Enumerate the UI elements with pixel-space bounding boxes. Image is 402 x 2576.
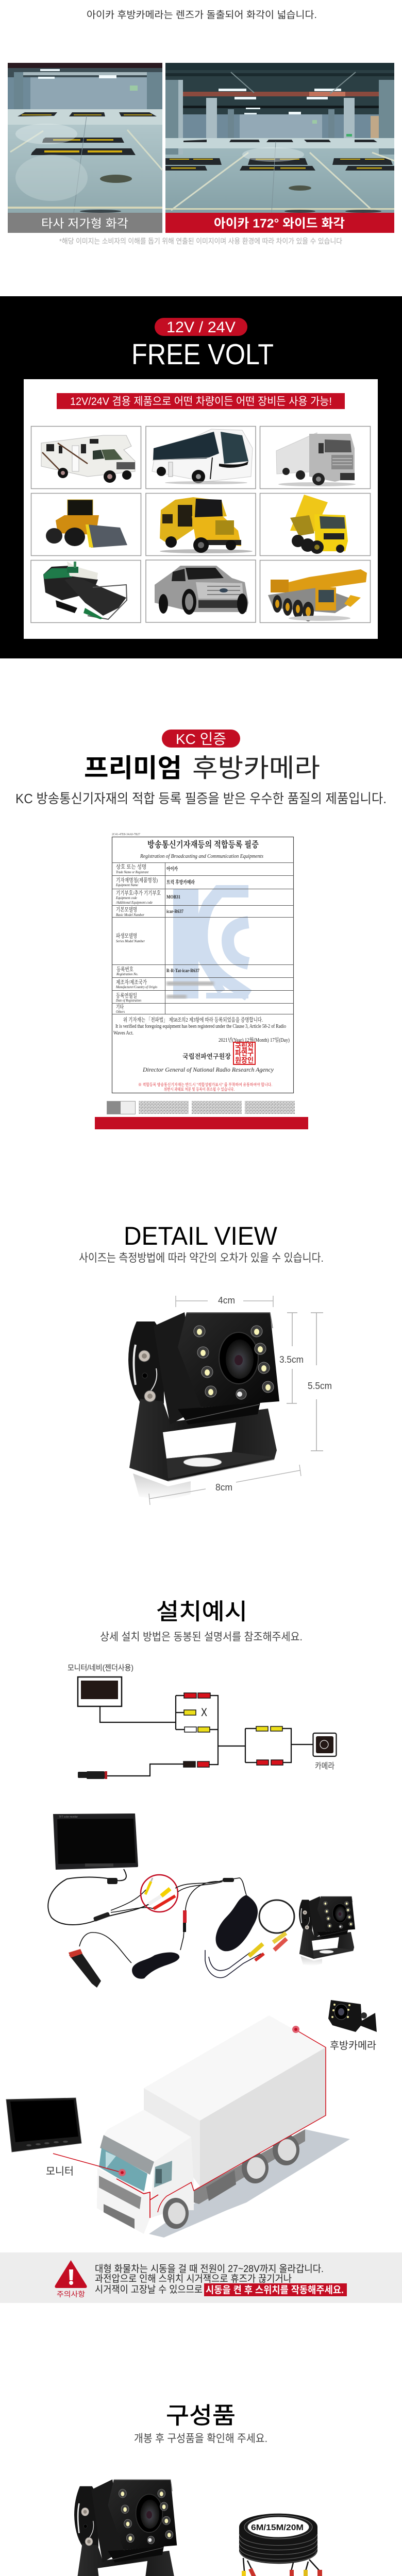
certificate text: R-R-Tat-icar-R637 xyxy=(166,968,199,973)
certificate text: 파생모델명 xyxy=(116,932,137,939)
product wiring photo xyxy=(48,1814,355,1988)
pill: KC: KC 인증 xyxy=(176,731,226,747)
cable coil small and power plug xyxy=(69,1933,179,1988)
photo: narrow angle parking lot xyxy=(8,63,162,213)
official stamp xyxy=(233,1042,255,1064)
component: video cable coil xyxy=(239,2514,322,2576)
warning highlight: 시동을 켠 후 스위치를 작동해주세요. xyxy=(206,2284,344,2296)
RCA connectors in red circle xyxy=(141,1875,178,1912)
certificate text: Basic Model Number xyxy=(116,913,144,917)
component: rear camera xyxy=(74,2479,177,2576)
certificate text: Equipment Name xyxy=(115,883,138,887)
caption: icar wide angle: 아이카 172° 와이드 화각 xyxy=(214,216,345,231)
certificate table lines xyxy=(112,862,294,1014)
vehicle grid frames xyxy=(31,427,370,622)
heading: components: 구성품 xyxy=(166,2402,236,2429)
certificate text: Trade Name or Registrant xyxy=(116,870,149,874)
vehicle: coach bus xyxy=(152,429,253,484)
dimension: width 4cm: 4cm xyxy=(218,1295,235,1306)
official stamp: 파연구 xyxy=(235,1049,254,1057)
certificate text: Director General of National Radio Research Agency xyxy=(142,1066,274,1073)
certificate text: 등록번호 xyxy=(116,965,133,973)
certificate text: It is verified that foregoing equipment has been registered under the Clause 3, Article 58-2 of Radio xyxy=(115,1024,286,1029)
heading: free volt: FREE VOLT xyxy=(131,338,274,371)
warning text: 과전압으로 인해 스위치 시거잭으로 휴즈가 끊기거나 xyxy=(95,2273,292,2284)
panel: viewing angle comparison xyxy=(8,9,394,245)
panel: detail view xyxy=(79,1222,332,1505)
heading: detail view: DETAIL VIEW xyxy=(124,1222,278,1250)
dimension: height 3.5cm: 3.5cm xyxy=(279,1354,304,1365)
connectors xyxy=(183,1693,283,1767)
icon: monitor xyxy=(78,1677,122,1706)
certificate text: icar-R637 xyxy=(166,909,183,914)
official stamp: 원장인 xyxy=(235,1056,254,1064)
certificate document: 2C41-47E8-34A0-7B27 xyxy=(112,833,140,836)
caption: other brand xyxy=(8,213,162,233)
certificate text: MOB31 xyxy=(166,894,180,900)
icon: warning triangle xyxy=(55,2260,87,2298)
pill: 12V / 24V xyxy=(155,318,247,336)
KC watermark xyxy=(173,889,248,998)
vehicle: box truck xyxy=(276,433,356,486)
certificate text xyxy=(113,839,290,1092)
icon: cigar plug xyxy=(78,1771,107,1779)
certificate text: ※ 적합등록 방송통신기자재는 반드시 "적합성평가표시" 를 부착하여 유통하여야 합니다. xyxy=(138,1082,272,1087)
certificate text: 2021년(Year) 12월(Month) 17일(Day) xyxy=(219,1037,290,1043)
certificate text: 기자재명칭(제품명칭) xyxy=(116,876,158,884)
caption: icar wide angle xyxy=(165,213,394,233)
wiring nodes xyxy=(119,2026,299,2176)
certificate text: Equipment code xyxy=(115,896,137,900)
certificate text: 아이카 xyxy=(166,866,178,872)
subheading: 사이즈는 측정방법에 따라 약간의 오차가 있을 수 있습니다. xyxy=(79,1251,324,1264)
vehicle: mobile crane xyxy=(268,569,367,621)
label: monitor: 모니터 xyxy=(46,2165,74,2177)
icon: camera xyxy=(313,1733,336,1756)
cable coil large xyxy=(216,1895,258,1951)
wiring diagram xyxy=(68,1664,336,1779)
heading: premium rear camera: 프리미엄 xyxy=(84,754,182,783)
certificate text: Date of Registration xyxy=(115,998,141,1003)
camera product image xyxy=(128,1312,279,1500)
camera cable loop and plugs xyxy=(205,1900,294,1978)
white vehicle panel xyxy=(24,379,378,639)
certificate text: Series Model Number xyxy=(116,939,145,943)
certificate text: 위반시 과태료 처분 및 등록이 취소될 수 있습니다. xyxy=(164,1087,234,1092)
monitor photo xyxy=(53,1814,138,1870)
camera thumbnail xyxy=(328,2000,377,2032)
monitor cable xyxy=(48,1869,155,1925)
certificate text: 트럭 후방카메라 xyxy=(166,879,195,886)
caption: other brand: 타사 저가형 화각 xyxy=(41,216,128,230)
icon: warning triangle: 주의사항 xyxy=(57,2290,85,2298)
certificate text: 국립전파연구원장 xyxy=(182,1053,231,1060)
warning text xyxy=(95,2263,324,2295)
warning text: 시거잭이 고장날 수 있으므로 xyxy=(95,2284,203,2295)
official stamp: 국립전 xyxy=(235,1042,254,1050)
dimension: height 5.5cm xyxy=(308,1313,332,1451)
warning band xyxy=(0,2252,402,2303)
barcodes xyxy=(107,1101,295,1114)
chassis and wheels xyxy=(194,2129,305,2204)
panel: installation example xyxy=(0,1599,402,2303)
wires xyxy=(100,1696,313,1776)
warning text: 대형 화물차는 시동을 걸 때 전원이 27~28V까지 올라갑니다. xyxy=(95,2263,324,2275)
pill: 12V / 24V: 12V / 24V xyxy=(166,319,236,336)
certificate text: 기기부호/추가 기기부호 xyxy=(116,889,161,896)
vehicle: pickup xyxy=(155,566,248,615)
video cable and red plug xyxy=(175,1878,246,1950)
monitor photo: TFT color monitor xyxy=(59,1816,78,1819)
intro text: 아이카 후방카메라는 렌즈가 돌출되어 화각이 넓습니다. xyxy=(87,9,317,21)
wiring diagram: 모니터/네비(젠더사용) xyxy=(68,1664,133,1672)
certificate text: 기본모델명 xyxy=(116,906,137,913)
banner: any vehicle: 12V/24V 겸용 제품으로 어떤 차량이든 어떤 장비든 사용 가능! xyxy=(70,396,332,408)
certificate text: Others xyxy=(116,1010,125,1014)
dimension: height 3.5cm xyxy=(279,1313,304,1403)
certificate text: Manufacturer/Country of Origin xyxy=(115,985,157,989)
certificate red bar xyxy=(95,1117,308,1129)
wiring diagram: X xyxy=(201,1706,207,1719)
certificate text: 등록연월일 xyxy=(116,992,137,999)
subheading: KC 방송통신기자재의 적합 등록 필증을 받은 우수한 품질의 제품입니다. xyxy=(15,791,387,806)
vehicle: combine harvester xyxy=(43,562,127,619)
wiring diagram: 카메라 xyxy=(315,1761,334,1771)
heading: premium rear camera xyxy=(84,754,320,783)
red wiring route xyxy=(53,2030,326,2218)
pill: KC xyxy=(162,730,240,748)
panel: free volt xyxy=(0,296,402,658)
dimension: width 4cm xyxy=(176,1295,273,1307)
certificate text: 기타 xyxy=(116,1003,124,1010)
vehicle: motorhome xyxy=(41,435,135,483)
certificate text: 제조자/제조국가 xyxy=(116,978,147,986)
cargo box xyxy=(144,2015,326,2187)
subheading: 상세 설치 방법은 동봉된 설명서를 참조해주세요. xyxy=(100,1631,303,1643)
certificate text: 상호 또는 성명 xyxy=(116,863,146,870)
certificate text: Registration of Broadcasting and Communication Equipments xyxy=(140,853,263,859)
vehicle: tracked bulldozer xyxy=(46,500,127,548)
dimension: depth 8cm xyxy=(149,1465,301,1505)
label: rear camera: 후방카메라 xyxy=(330,2040,376,2052)
certificate document xyxy=(112,833,294,1093)
certificate text: Registration No. xyxy=(116,972,138,976)
truck cab xyxy=(97,2110,194,2234)
truck installation diagram xyxy=(6,2000,377,2238)
vehicle: dump truck xyxy=(290,495,348,554)
panel: components xyxy=(74,2402,328,2576)
camera small photo xyxy=(299,1896,355,1966)
photo: wide angle parking lot xyxy=(165,63,394,213)
panel: KC certification xyxy=(15,730,387,1129)
certificate text: 방송통신기자재등의 적합등록 필증 xyxy=(147,839,259,850)
certificate text: Waves Act. xyxy=(113,1030,133,1036)
heading: premium rear camera: 후방카메라 xyxy=(192,754,320,783)
monitor thumbnail xyxy=(6,2098,81,2152)
dimension: depth 8cm: 8cm xyxy=(215,1482,232,1493)
heading: installation example: 설치예시 xyxy=(156,1599,247,1624)
footnote: *해당 이미지는 소비자의 이해를 돕기 위해 연출된 이미지이며 사용 환경에 따라 차이가 있을 수 있습니다 xyxy=(59,237,342,245)
subheading: 개봉 후 구성품을 확인해 주세요. xyxy=(134,2433,267,2445)
certificate text: /Additional Equipment code xyxy=(115,901,153,905)
dimension: height 5.5cm: 5.5cm xyxy=(308,1381,332,1391)
vehicle: school bus xyxy=(160,497,253,553)
certificate text: 위 기자재는 「전파법」 제58조의2 제3항에 따라 등록되었음을 증명합니다. xyxy=(123,1016,263,1023)
component: video cable coil: 6M/15M/20M xyxy=(251,2523,304,2532)
